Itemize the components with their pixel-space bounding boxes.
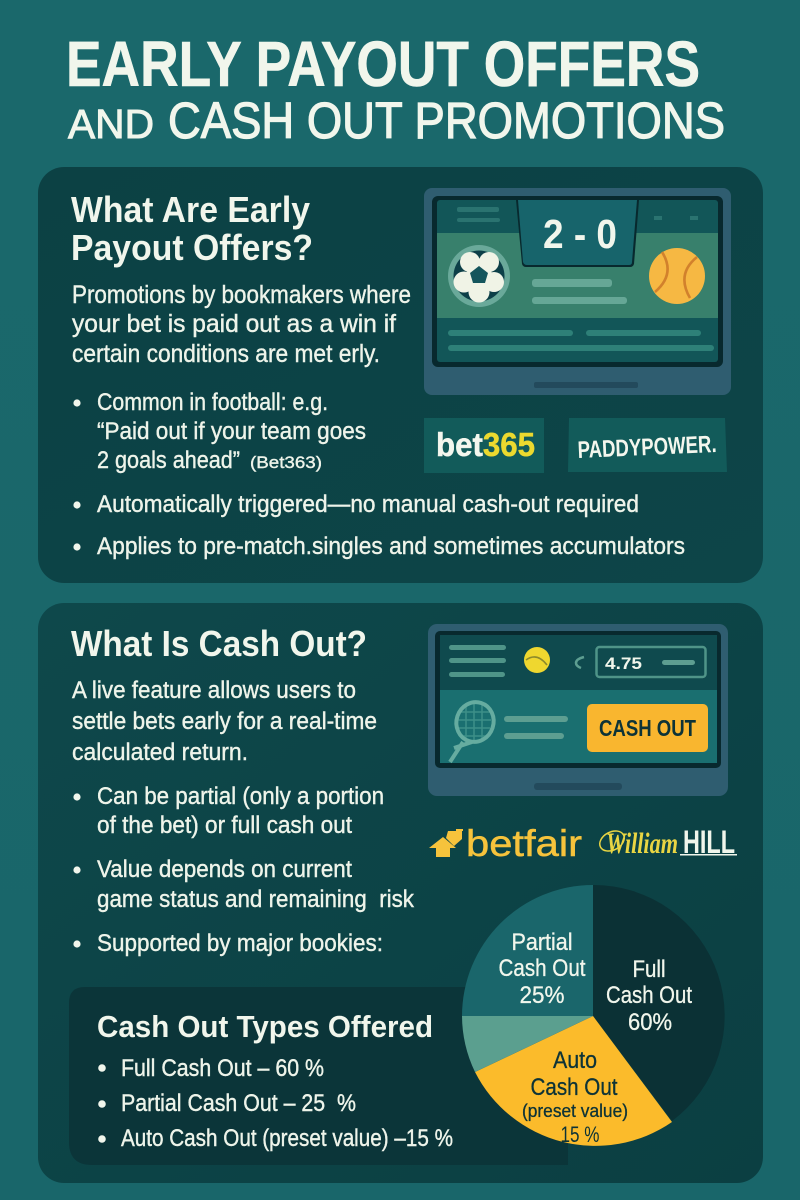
bullet: common in football — [73, 389, 366, 474]
logo: paddy power — [568, 418, 727, 472]
heading: cash out types offered: Cash Out Types Offered — [97, 1009, 433, 1044]
slice: auto cash out — [475, 1016, 672, 1146]
logo: bet365: bet365 — [436, 426, 535, 463]
label: auto: (preset value) — [522, 1101, 628, 1121]
text block: early payout description — [72, 281, 411, 368]
bullet: value depends: game status and remaining risk — [97, 886, 415, 913]
bullet: supported by: Supported by major bookies: — [97, 930, 383, 957]
bullet: applies to pre-match: Applies to pre-match.singles and sometimes accumulators — [97, 533, 685, 560]
logo: william hill: William — [606, 827, 678, 860]
icon: laptop cash out screen — [428, 624, 728, 796]
label: auto: Auto — [553, 1047, 597, 1074]
text block: early payout description: your bet is paid out as a win if — [72, 310, 396, 338]
label: partial — [498, 929, 586, 1009]
panel: early payout offers — [38, 167, 763, 583]
button: cash out: CASH OUT — [599, 715, 696, 741]
title — [66, 28, 725, 149]
bullet: partial or full: of the bet) or full cash out — [97, 812, 352, 839]
label: full — [606, 956, 692, 1036]
slice: full cash out 60% — [593, 885, 725, 1121]
score: 2 - 0 — [543, 211, 617, 257]
bullet: partial or full — [73, 783, 384, 839]
bullet: common in football: “Paid out if your team goes — [97, 418, 366, 445]
label: auto: 15 % — [560, 1122, 600, 1147]
bullet: common in football: (Bet363) — [250, 453, 322, 472]
bullet: partial or full: Can be partial (only a portion — [97, 783, 384, 810]
panel: cash out types — [69, 987, 568, 1165]
label: full: Full — [632, 956, 666, 983]
title: AND — [68, 101, 154, 147]
text block: cash out description: A live feature allows users to — [72, 677, 356, 704]
pie chart: cash out types — [462, 885, 725, 1147]
text block: cash out description: settle bets early for a real-time — [72, 708, 377, 735]
heading: what is cash out: What Is Cash Out? — [71, 623, 367, 664]
title: CASH OUT PROMOTIONS — [168, 92, 725, 149]
logo: william hill: HILL — [683, 824, 735, 860]
logo: betfair — [429, 823, 582, 864]
bullet: common in football: Common in football: e.g. — [97, 389, 328, 416]
list item: partial cash out: Partial Cash Out – 25 % — [121, 1090, 356, 1117]
list item: auto cash out: Auto Cash Out (preset value) –15 % — [121, 1125, 453, 1152]
label: partial: Cash Out — [498, 955, 586, 982]
icon: laptop scoreboard — [424, 188, 731, 395]
text block: cash out description: calculated return. — [72, 739, 248, 766]
bullet: common in football: 2 goals ahead” — [97, 447, 240, 474]
label: partial: 25% — [520, 982, 564, 1009]
label: full: 60% — [628, 1009, 672, 1036]
button: cash out — [587, 704, 708, 752]
icon: tennis ball — [649, 248, 705, 304]
panel: cash out — [38, 603, 763, 1183]
logo: william hill — [596, 824, 737, 860]
label: auto: Cash Out — [530, 1074, 618, 1101]
logo: paddy power: PADDYPOWER. — [577, 431, 717, 464]
bullet: automatically triggered: Automatically triggered—no manual cash-out required — [97, 491, 639, 518]
icon: football — [448, 245, 510, 307]
bullet: value depends: Value depends on current — [97, 856, 352, 883]
text block: cash out description — [72, 677, 377, 766]
label: partial: Partial — [512, 929, 572, 956]
slice: unlabelled — [462, 1016, 593, 1072]
label: auto — [522, 1047, 628, 1147]
text block: early payout description: Promotions by bookmakers where — [72, 281, 411, 309]
slice: partial cash out — [462, 885, 593, 1016]
icon: tennis racket — [450, 697, 499, 762]
logo: bet365 — [424, 418, 544, 473]
heading: what are early payout offers: What Are Early — [71, 189, 310, 230]
odds value: 4.75 — [605, 654, 642, 673]
text block: early payout description: certain conditions are met erly. — [72, 340, 380, 368]
bullet: value depends — [73, 856, 415, 913]
logo: betfair: betfair — [466, 823, 582, 864]
label: full: Cash Out — [606, 982, 692, 1009]
heading: what are early payout offers — [71, 189, 313, 268]
list item: full cash out: Full Cash Out – 60 % — [121, 1055, 324, 1082]
heading: what are early payout offers: Payout Offers? — [71, 227, 313, 268]
